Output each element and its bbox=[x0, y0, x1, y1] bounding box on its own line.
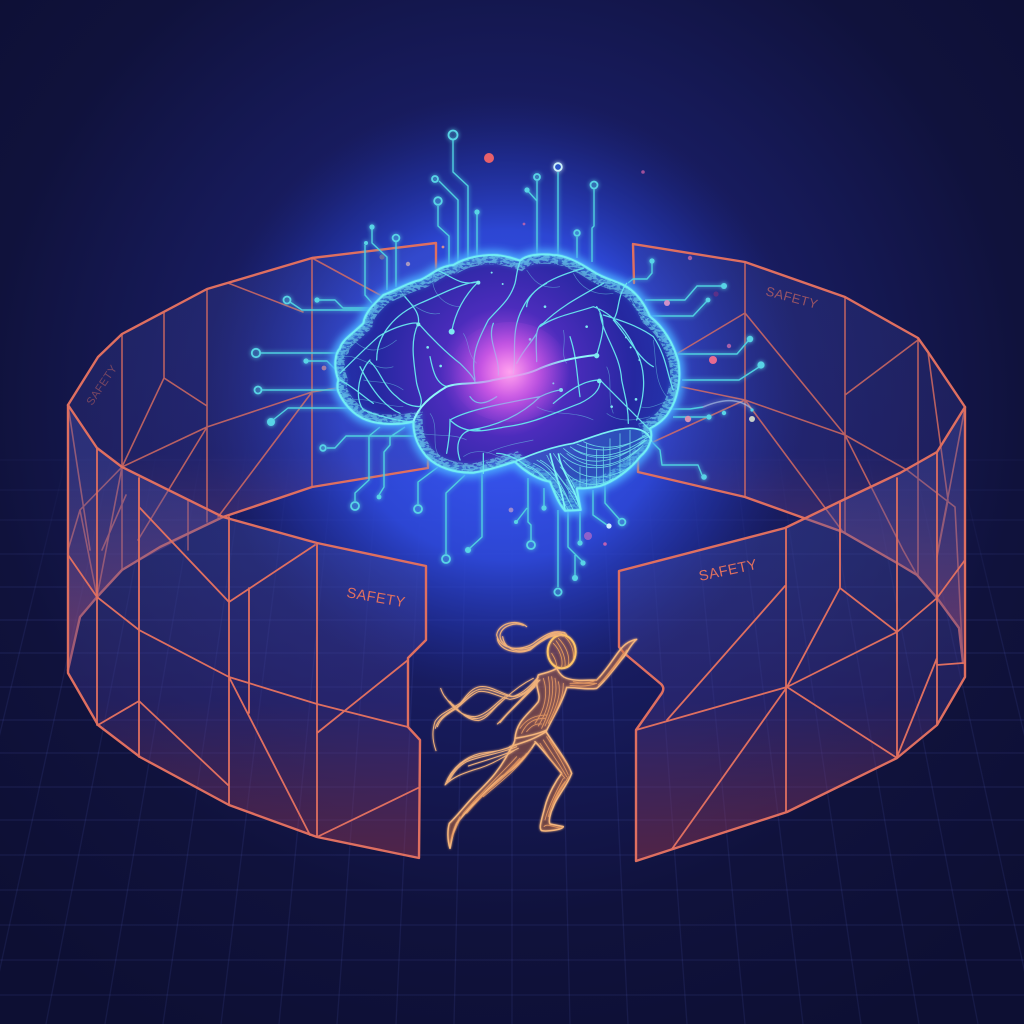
terminal bright top bbox=[554, 163, 562, 171]
panel: front right wall bbox=[619, 407, 965, 861]
terminals: dots bbox=[267, 187, 765, 581]
running figure bbox=[433, 623, 637, 848]
front right wall surface bbox=[619, 407, 965, 861]
left traces bbox=[261, 300, 438, 504]
back left wall surface bbox=[68, 243, 436, 670]
brain body bbox=[335, 254, 679, 511]
head bbox=[548, 635, 576, 668]
blue halo behind brain bbox=[205, 95, 805, 695]
panel: back right wall bbox=[633, 244, 965, 663]
front left wall struts bbox=[68, 448, 418, 837]
front right wall struts bbox=[636, 452, 965, 849]
floating pink particles bbox=[322, 153, 755, 546]
panel: back left wall bbox=[68, 243, 436, 670]
brain glow bbox=[335, 254, 679, 511]
cerebellum hatching bbox=[520, 430, 650, 510]
long scarf bbox=[433, 677, 540, 751]
body fibres bbox=[451, 650, 627, 842]
lower temporal line bbox=[515, 428, 652, 462]
back right wall frame bbox=[633, 244, 965, 663]
inner cyan rim bbox=[335, 254, 679, 511]
top traces bbox=[365, 140, 594, 303]
label: safety back right: SAFETY bbox=[764, 283, 820, 312]
label: safety front left: SAFETY bbox=[345, 585, 407, 611]
back right wall surface bbox=[633, 244, 965, 663]
brain inner colour bbox=[336, 255, 678, 510]
brain outline bbox=[335, 254, 679, 511]
central fissure bbox=[413, 355, 597, 422]
pale arc bbox=[703, 401, 753, 410]
hair strands on head bbox=[552, 637, 573, 667]
floor grid bbox=[0, 430, 1024, 1024]
gyri lines bbox=[340, 262, 673, 473]
front right wall frame bbox=[619, 407, 965, 861]
right traces bbox=[628, 263, 759, 475]
terminals: rings bbox=[252, 130, 625, 596]
label: safety front right: SAFETY bbox=[698, 557, 759, 585]
circuit traces around brain bbox=[252, 130, 765, 596]
panel: front left wall bbox=[68, 405, 426, 858]
front left wall frame bbox=[68, 405, 426, 858]
body fill bbox=[448, 639, 637, 848]
brain magenta core bbox=[450, 322, 570, 422]
label: safety back left: SAFETY bbox=[85, 363, 120, 408]
bottom traces bbox=[446, 472, 620, 587]
cerebellum stem bbox=[550, 453, 581, 511]
back right wall struts bbox=[653, 262, 965, 663]
neuron nodes bbox=[416, 272, 640, 408]
front left wall surface bbox=[68, 405, 426, 858]
edge texture bbox=[335, 254, 679, 511]
body outline bbox=[448, 639, 637, 848]
back left wall frame bbox=[68, 243, 436, 670]
lower scarf bbox=[445, 743, 520, 785]
cerebellum fill bbox=[515, 428, 652, 511]
hair bbox=[497, 623, 567, 652]
brain bbox=[325, 244, 690, 520]
fine mesh lines bbox=[343, 270, 670, 460]
back left wall struts bbox=[68, 258, 380, 630]
